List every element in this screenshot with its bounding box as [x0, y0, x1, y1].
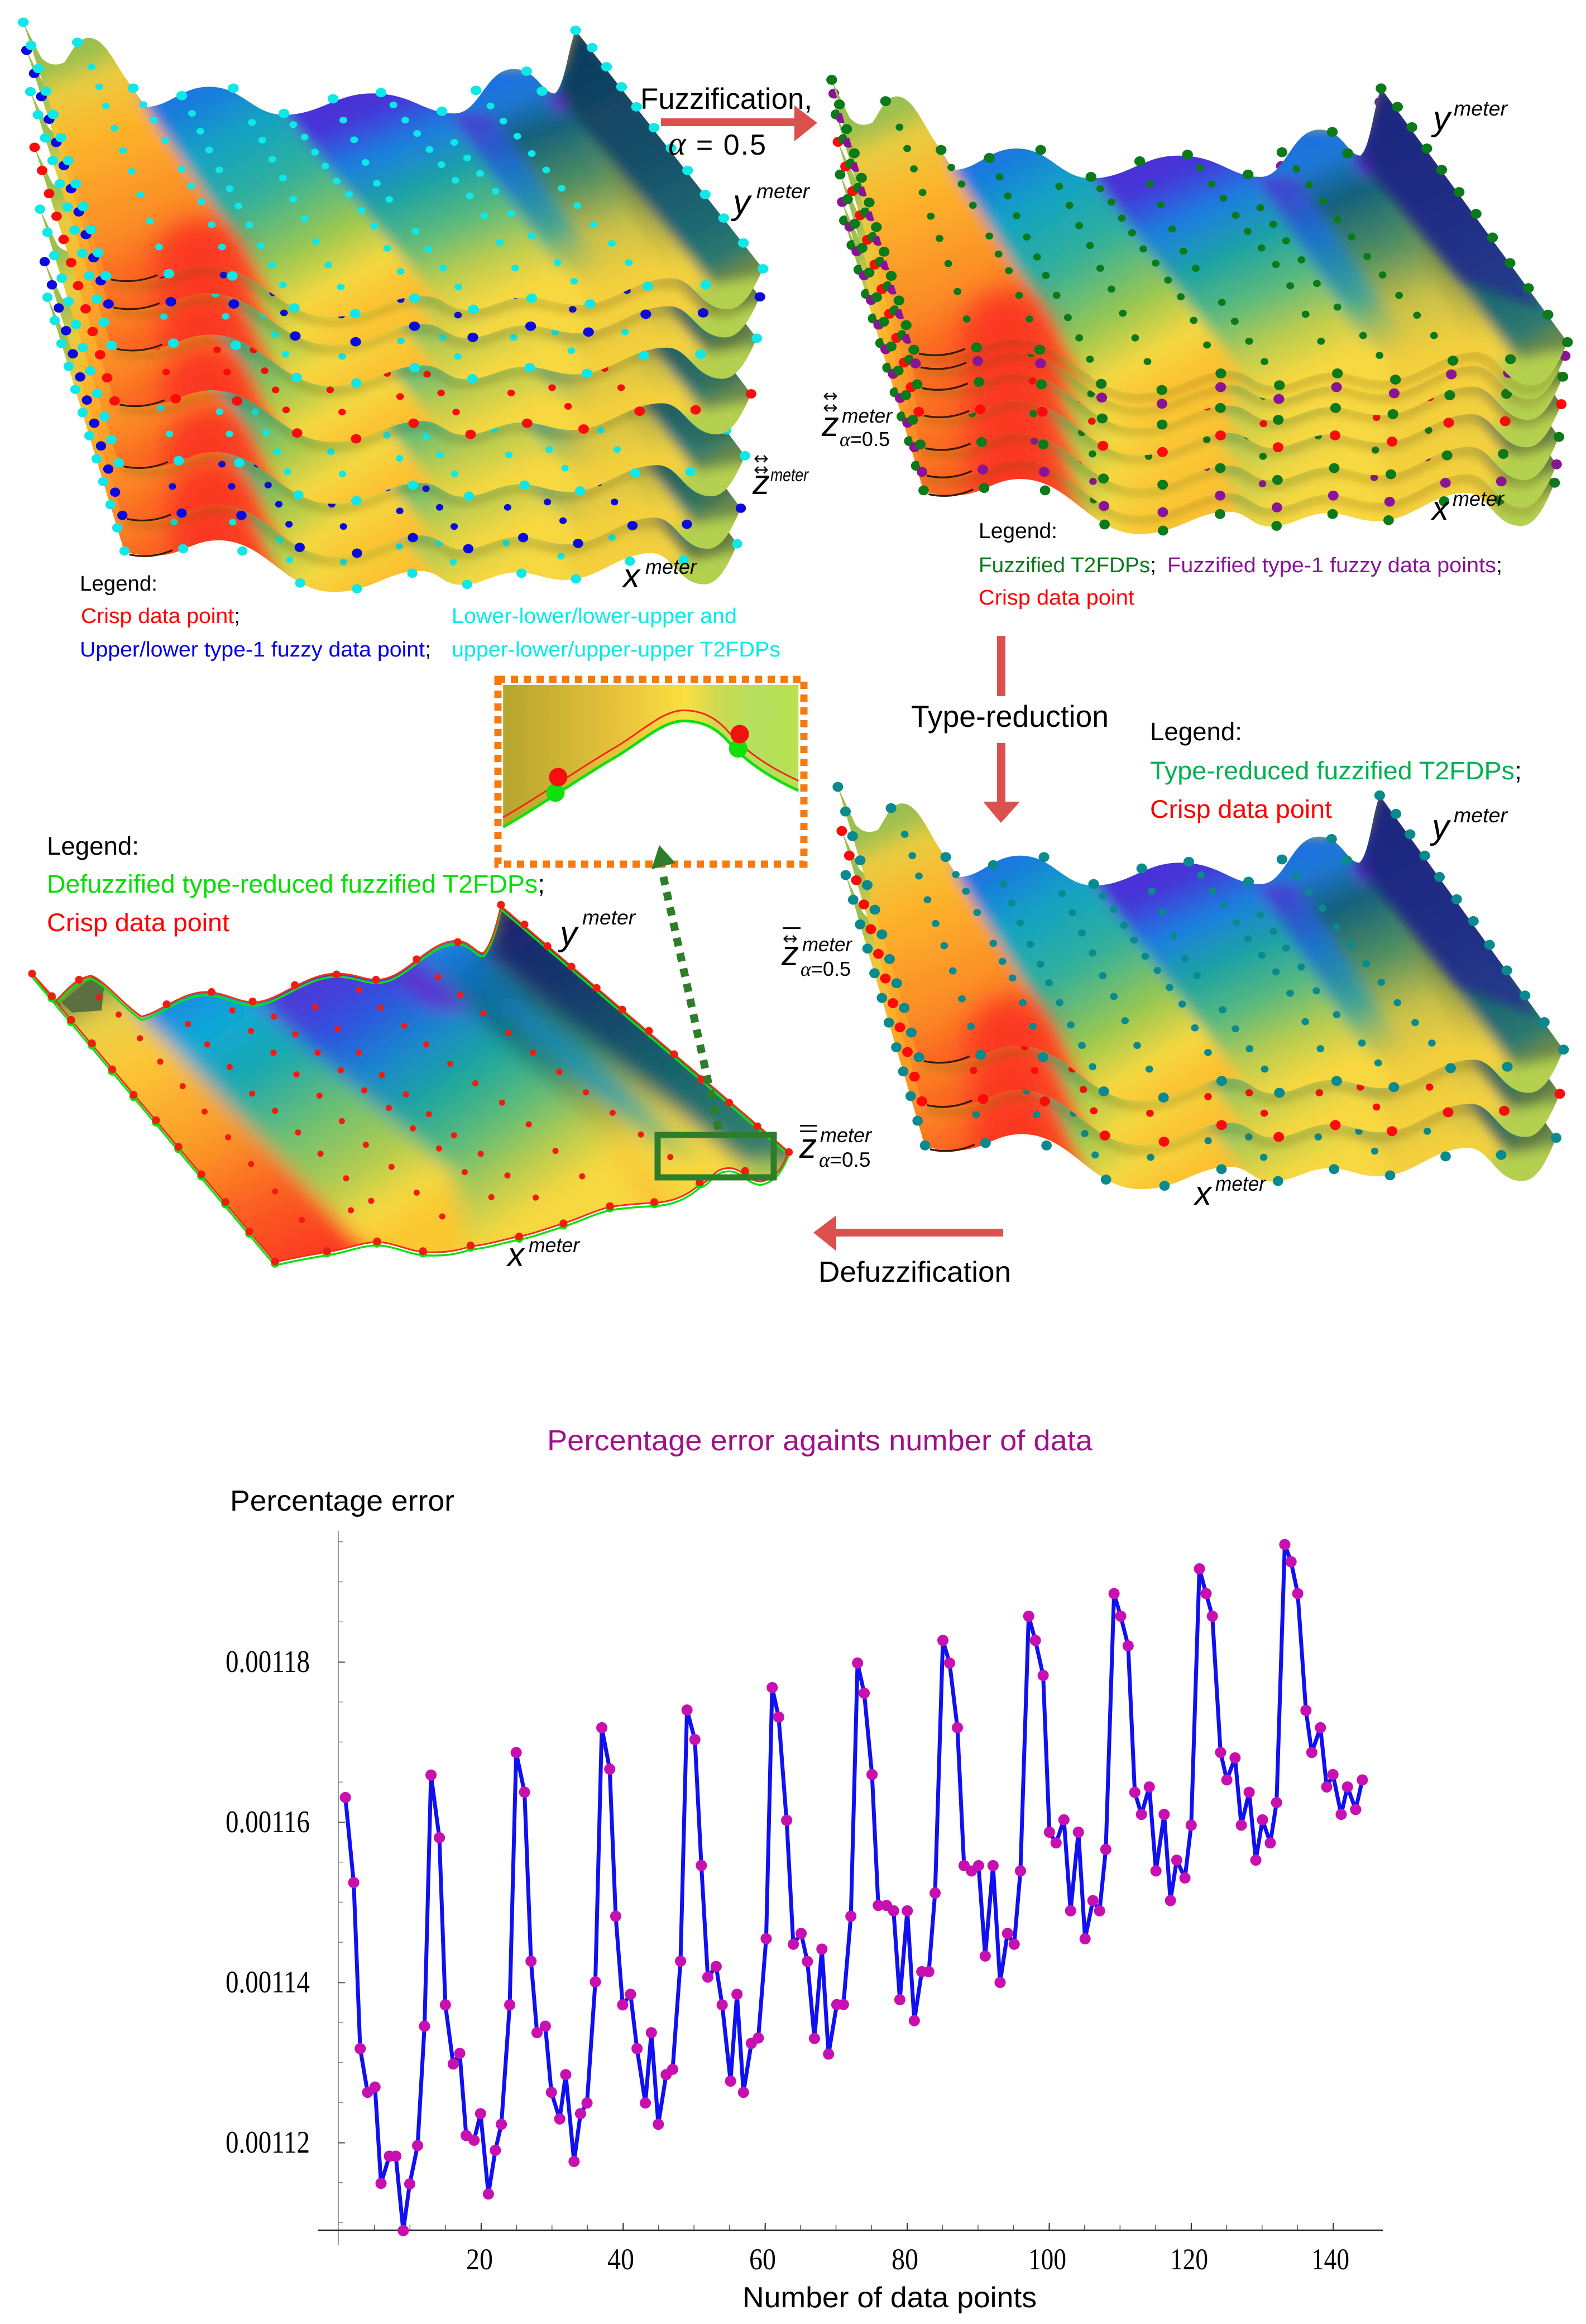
y axis tick labels — [226, 1645, 310, 2160]
axis label: x meter: meter — [645, 555, 698, 578]
x axis tick labels: 120 — [1170, 2242, 1208, 2276]
arrow: type-reduction: Type-reduction — [911, 699, 1109, 734]
stacked fuzzified surface layers — [826, 75, 1573, 536]
axis label: z double bar alpha 0.5 meter — [799, 1124, 873, 1172]
axis label: z double arrow meter — [752, 448, 809, 502]
axis label: z double arrow meter: z — [752, 463, 770, 502]
stacked surface layers with data points — [0, 0, 785, 609]
axis label: z bar alpha 0.5 meter: α=0.5 — [801, 957, 851, 980]
axis label: x meter: x — [506, 1236, 525, 1273]
axis label: z double arrow meter: ↔ — [754, 459, 769, 480]
axis label: x meter — [1193, 1172, 1267, 1212]
x axis tick labels: 20 — [466, 2242, 493, 2276]
axis label: x meter: meter — [1215, 1172, 1267, 1195]
y axis tick labels: 0.00114 — [226, 1965, 310, 2000]
highlight box on surface — [658, 1135, 774, 1177]
axis label: y meter: y — [1431, 99, 1453, 138]
axis label: z double bar alpha 0.5 meter: z — [799, 1127, 817, 1166]
axis label: y meter: meter — [1454, 97, 1508, 120]
axis label: z alpha 0.5 meter: ↔ — [823, 385, 838, 406]
axis label: z double arrow meter: meter — [770, 464, 809, 485]
panel: defuzzified surface — [0, 832, 873, 1277]
data series: points 1 to 63 — [346, 1688, 787, 2231]
chart title: Percentage error againts number of data — [547, 1425, 1093, 1457]
legend: fuzzified points: Legend: — [979, 519, 1057, 543]
inset: magnified crisp versus defuzzified edge — [498, 679, 804, 864]
x axis tick labels — [466, 2242, 1349, 2276]
legend: fuzzified points — [979, 519, 1502, 610]
axis label: x meter: x — [1430, 490, 1450, 527]
y axis tick labels: 0.00118 — [226, 1645, 310, 1679]
data series: points 63 to 144 — [787, 1545, 1362, 2054]
legend: type-reduced points: Legend: — [1150, 717, 1242, 746]
x axis tick labels: 100 — [1028, 2242, 1066, 2276]
axis label: z double bar alpha 0.5 meter: meter — [820, 1124, 873, 1147]
axis label: z alpha 0.5 meter: α=0.5 — [840, 428, 890, 451]
axis label: z bar alpha 0.5 meter: ↔ — [783, 928, 798, 949]
axis label: z bar alpha 0.5 meter: z — [781, 935, 799, 973]
axis label: z bar alpha 0.5 meter: meter — [802, 933, 853, 956]
y axis tick labels: 0.00112 — [226, 2125, 310, 2160]
axis label: x meter: x — [1193, 1175, 1213, 1212]
legend: type-reduced points: Type-reduced fuzzified T2FDPs ; — [1150, 756, 1522, 785]
axis label: x meter: meter — [529, 1234, 581, 1257]
y axis title: Percentage error — [230, 1485, 454, 1517]
axis label: z bar alpha 0.5 meter — [781, 927, 853, 980]
legend: fuzzified points: Fuzzified type-1 fuzzy data points ; — [1167, 554, 1502, 577]
axis label: z alpha 0.5 meter — [821, 385, 893, 451]
axis label: z double arrow meter: ↔ — [754, 448, 769, 469]
axis label: y meter — [731, 180, 811, 222]
arrow: fuzzification: Fuzzification, — [640, 83, 812, 116]
axis label: y meter — [1430, 804, 1508, 846]
x axis tick labels: 80 — [892, 2242, 918, 2276]
legend: fuzzified points: Crisp data point — [979, 586, 1134, 610]
axis label: y meter: y — [1430, 808, 1451, 846]
x axis tick labels: 60 — [749, 2242, 776, 2276]
legend: crisp, type-1 and T2FDP colours: upper-lower/upper-upper T2FDPs — [452, 638, 780, 662]
axis label: x meter — [1430, 487, 1505, 527]
legend: crisp, type-1 and T2FDP colours: Legend: — [80, 572, 157, 596]
axis label: z alpha 0.5 meter: z — [821, 405, 839, 444]
y axis tick labels: 0.00116 — [226, 1805, 310, 1839]
legend: crisp, type-1 and T2FDP colours: Lower-lower/lower-upper and — [452, 605, 737, 628]
x axis tick labels: 140 — [1311, 2242, 1349, 2276]
axis label: y meter: meter — [1454, 804, 1508, 827]
axis label: y meter: y — [731, 183, 753, 222]
axis label: y meter: meter — [582, 906, 636, 929]
arrow: fuzzification: α = 0.5 — [668, 125, 766, 162]
legend: defuzzified points: Legend: — [47, 832, 139, 860]
axis label: x meter: meter — [1453, 487, 1505, 510]
axis label: z double bar alpha 0.5 meter: α=0.5 — [819, 1148, 870, 1172]
legend: crisp, type-1 and T2FDP colours — [80, 572, 780, 662]
legend: defuzzified points — [47, 832, 545, 937]
legend: defuzzified points: Defuzzified type-reduced fuzzified T2FDPs ; — [47, 870, 545, 898]
arrow: dashed green zoom pointer — [651, 845, 718, 1129]
legend: type-reduced points: Crisp data point — [1150, 795, 1333, 823]
axes and tick marks — [318, 1502, 1383, 2245]
axis label: y meter — [1431, 97, 1508, 138]
arrow: type-reduction — [911, 636, 1109, 823]
panel: fuzzified surface — [808, 56, 1586, 610]
arrow: defuzzification — [813, 1215, 1011, 1288]
x axis tick labels: 40 — [607, 2242, 634, 2276]
legend: crisp, type-1 and T2FDP colours: Upper/lower type-1 fuzzy data point ; — [80, 638, 431, 662]
axis label: x meter: x — [621, 557, 641, 595]
axis label: x meter — [621, 555, 698, 595]
legend: fuzzified points: Fuzzified T2FDPs; — [979, 554, 1156, 577]
stacked type-reduced surface layers — [832, 782, 1569, 1191]
axis label: z alpha 0.5 meter: ↔ — [823, 397, 838, 418]
axis label: y meter: meter — [756, 180, 811, 203]
axis label: x meter — [506, 1234, 581, 1273]
chart: percentage error against number of data — [226, 1425, 1383, 2314]
defuzzified single surface with points — [0, 888, 812, 1277]
legend: defuzzified points: Crisp data point — [47, 908, 230, 937]
axis label: y meter: y — [558, 914, 579, 953]
arrow: defuzzification: Defuzzification — [818, 1256, 1011, 1288]
axis label: z alpha 0.5 meter: meter — [842, 404, 893, 427]
arrow: fuzzification — [640, 83, 817, 162]
panel: crisp and type-2 fuzzy data surface — [0, 0, 811, 662]
x axis title: Number of data points — [742, 2282, 1037, 2314]
legend: crisp, type-1 and T2FDP colours: Crisp data point; — [81, 605, 240, 628]
axis label: y meter — [558, 906, 636, 953]
panel: type-reduced surface — [781, 717, 1585, 1212]
legend: type-reduced points — [1150, 717, 1522, 823]
